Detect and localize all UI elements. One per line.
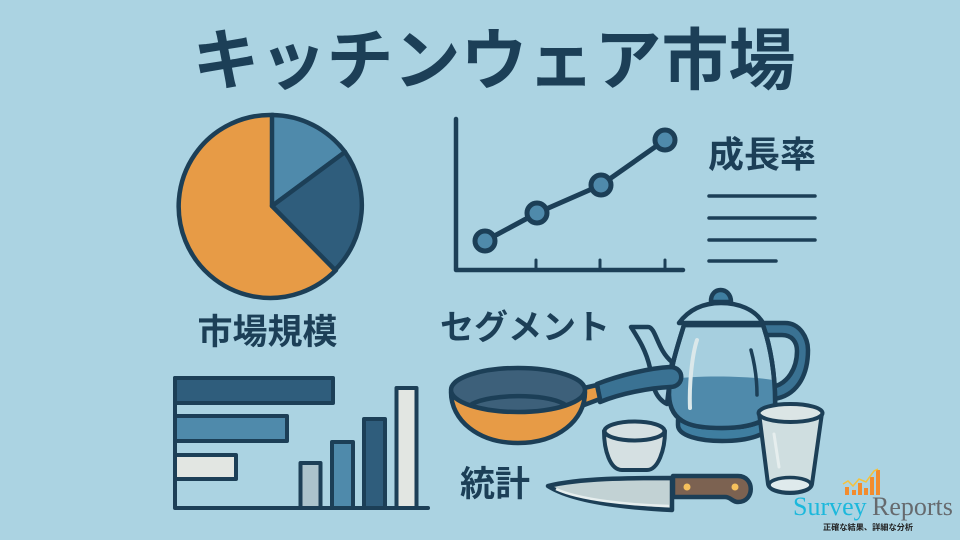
pan rim [451,368,585,412]
kettle body [669,325,775,428]
pan body [451,392,585,443]
label: segment: セグメント [440,309,610,347]
pan handle [597,367,681,402]
kettle lid [679,303,763,323]
label: market size: 市場規模 [197,313,338,352]
label: statistics: 統計 [460,465,530,504]
title: キッチンウェア市場 [192,24,796,99]
pie chart [179,115,362,298]
logo bars [845,470,880,495]
logo: Survey Reports: Reports [872,492,953,521]
bar charts [175,378,428,508]
icon: kettle [631,290,808,441]
knife blade [548,478,672,510]
logo trend line [843,469,878,486]
kettle knob [711,290,731,302]
line chart [456,119,683,270]
kettle highlight [690,340,697,408]
kettle spout [631,327,672,404]
kettle base [678,420,772,441]
logo: Survey Reports [793,469,953,532]
logo wordmark: Survey [793,492,867,521]
rivets [684,484,738,490]
text lines [709,196,815,261]
icon: small cup [604,422,665,470]
icon: glass [758,404,822,493]
kettle handle [762,323,808,399]
logo tagline: 正確な結果、詳細な分析 [823,522,913,532]
label: growth rate: 成長率 [708,134,816,175]
kettle water [671,376,774,426]
knife handle [673,476,751,502]
icon: frying pan [451,367,681,443]
pan connector [584,385,600,405]
icon: knife [548,476,751,510]
